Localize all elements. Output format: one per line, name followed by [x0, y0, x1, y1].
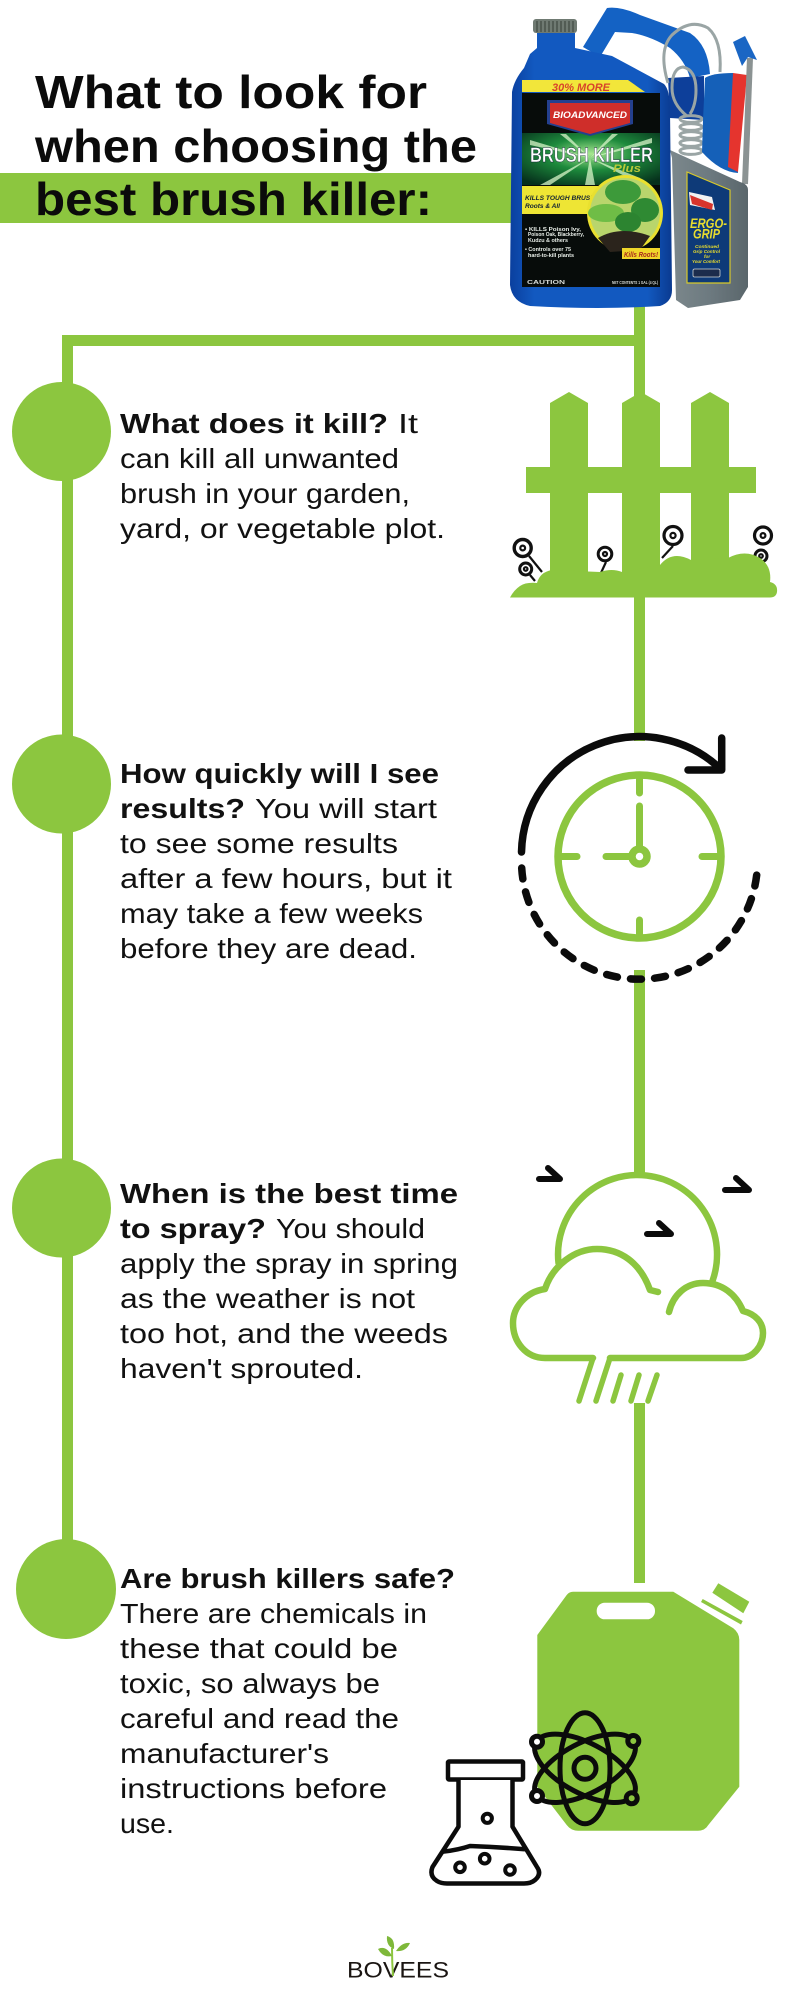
yellow strip: [522, 80, 645, 92]
product image: brush killer bottle and sprayer: CAUTION: [527, 280, 566, 286]
item 1: text: [120, 408, 445, 544]
item 3: text: to spray?: [120, 1213, 266, 1244]
item 3: text: When is the best time: [120, 1178, 458, 1209]
product image: brush killer bottle and sprayer: • Controls over 75: [525, 247, 571, 253]
birds: [539, 1168, 749, 1234]
item 1: text: It: [398, 408, 418, 439]
item 4: text: careful and read the: [120, 1703, 399, 1734]
logo: Bovees: BOVEES: [347, 1958, 449, 1982]
product image: brush killer bottle and sprayer: 30% MORE: [552, 82, 611, 94]
wand: [745, 58, 750, 184]
item 4: bullet circle: [16, 1539, 116, 1639]
clock face: [558, 775, 721, 938]
product image: brush killer bottle and sprayer: Continued: [695, 244, 719, 249]
circular arrow: [522, 737, 722, 852]
title: [34, 66, 477, 225]
product image: brush killer bottle and sprayer: Poison Oak, Blackberry,: [528, 232, 585, 238]
item 4: text: There are chemicals in: [120, 1598, 427, 1629]
product name: BRUSH KILLER: [530, 144, 653, 167]
item 3: text: too hot, and the weeds: [120, 1318, 448, 1349]
product image: brush killer bottle and sprayer: hard-to-kill plants: [528, 253, 574, 259]
nozzle: [733, 36, 757, 66]
item 4: text: Are brush killers safe?: [120, 1563, 455, 1594]
item 2: text: to see some results: [120, 828, 398, 859]
item 2: text: results?: [120, 793, 245, 824]
product image: brush killer bottle and sprayer: GRIP: [693, 226, 721, 242]
sprayer caddy: [670, 150, 748, 308]
title: best brush killer:: [35, 173, 432, 225]
handle of bottle: [583, 8, 710, 78]
caddy label: [687, 172, 730, 283]
bottle body: [510, 33, 672, 308]
item 1: text: yard, or vegetable plot.: [120, 513, 445, 544]
item 1: bullet circle: [12, 382, 111, 481]
item 2: text: before they are dead.: [120, 933, 417, 964]
yellow claim band: [522, 186, 598, 214]
item 1: text: brush in your garden,: [120, 478, 410, 509]
product image: brush killer bottle and sprayer: • KILLS Poison Ivy,: [525, 227, 582, 233]
item 3: text: apply the spray in spring: [120, 1248, 458, 1279]
red shield logo: [547, 100, 633, 136]
product image: brush killer bottle and sprayer: Kudzu & others: [528, 238, 568, 244]
title: when choosing the: [34, 120, 477, 172]
item 4: text: manufacturer's: [120, 1738, 329, 1769]
item 4: text: these that could be: [120, 1633, 398, 1664]
icon: clock with circular arrow: [522, 737, 758, 979]
coiled hose: [664, 24, 720, 154]
item 3: text: as the weather is not: [120, 1283, 415, 1314]
item 1: text: What does it kill?: [120, 408, 388, 439]
product image: brush killer bottle and sprayer: [510, 8, 757, 308]
bottle cap: [533, 19, 577, 33]
product image: brush killer bottle and sprayer: Roots & All: [525, 203, 560, 210]
icon: sun, cloud and rain: [513, 1168, 763, 1401]
plant illustration: [587, 175, 663, 251]
product image: brush killer bottle and sprayer: Kills Roots!: [624, 250, 658, 259]
item 3: bullet circle: [12, 1158, 111, 1258]
dashed arc: [522, 862, 758, 979]
icon: fence with flowers: [510, 392, 777, 598]
item 2: text: How quickly will I see: [120, 758, 439, 789]
item 2: text: You will start: [255, 793, 437, 824]
title: What to look for: [35, 66, 427, 118]
item 3: text: haven't sprouted.: [120, 1353, 363, 1384]
item 2: text: may take a few weeks: [120, 898, 423, 929]
item 2: text: [120, 758, 452, 964]
green rays: [522, 133, 660, 185]
item 1: text: can kill all unwanted: [120, 443, 399, 474]
item 2: text: after a few hours, but it: [120, 863, 452, 894]
icon: atom: [524, 1713, 646, 1824]
logo: Bovees: [347, 1936, 449, 1982]
product image: brush killer bottle and sprayer: KILLS TOUGH BRUSH: [525, 195, 595, 202]
product image: brush killer bottle and sprayer: BIOADVANCED: [553, 110, 627, 121]
item 3: text: You should: [276, 1213, 425, 1244]
icon: chemistry flask: [431, 1762, 539, 1884]
icon: green jerry can: [537, 1583, 749, 1831]
item 3: text: [120, 1178, 458, 1384]
product image: brush killer bottle and sprayer: ERGO-: [690, 215, 727, 231]
connector lines: timeline: [62, 296, 645, 1583]
green title band: [0, 173, 514, 223]
item 4: text: [120, 1563, 455, 1839]
sprayer grip: [702, 73, 738, 173]
product image: brush killer bottle and sprayer: Plus: [613, 163, 641, 175]
item 2: bullet circle: [12, 734, 111, 834]
product image: brush killer bottle and sprayer: Grip Control: [693, 249, 721, 254]
product image: brush killer bottle and sprayer: Your Comfort: [692, 259, 720, 264]
black label: [522, 93, 660, 287]
item 4: text: toxic, so always be: [120, 1668, 380, 1699]
item 4: text: use.: [120, 1808, 174, 1839]
product image: brush killer bottle and sprayer: for: [704, 254, 710, 259]
item 4: text: instructions before: [120, 1773, 387, 1804]
product image: brush killer bottle and sprayer: NET CONTENTS 1 GAL (4 QL): [612, 280, 658, 285]
